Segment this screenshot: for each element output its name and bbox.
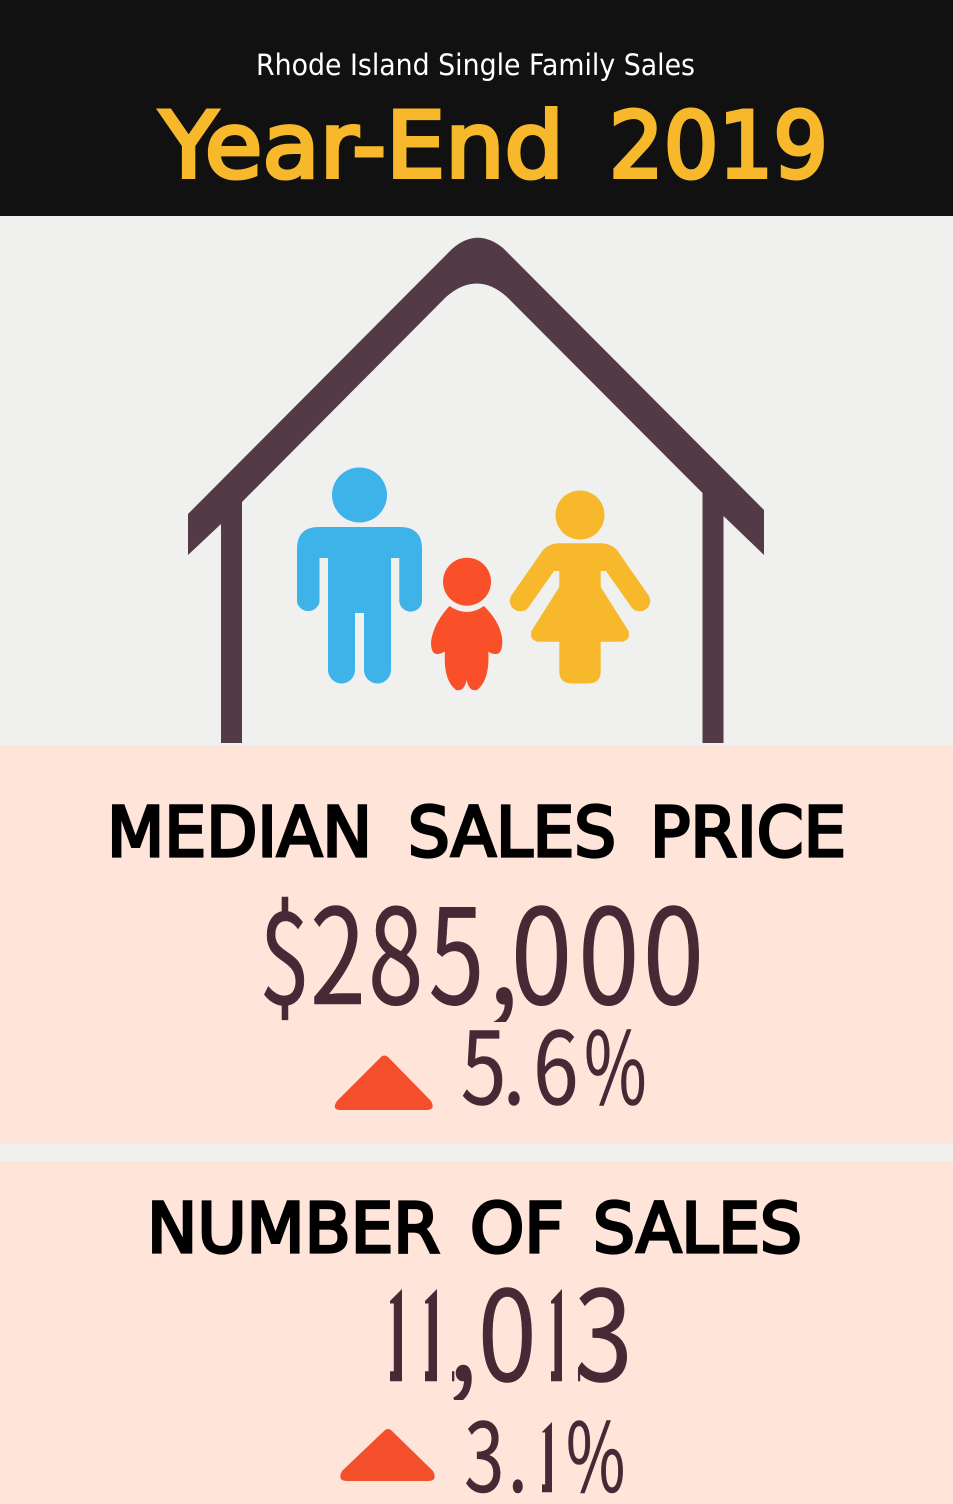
value: ,000 [488, 852, 704, 1043]
change: % [584, 988, 647, 1133]
change [461, 988, 647, 1134]
heading: MEDIAN [107, 793, 372, 873]
subtitle: Rhode Island Single Family Sales [256, 48, 695, 82]
icon: house outline [188, 238, 764, 743]
panel: median sales price [0, 745, 953, 1144]
title [159, 94, 828, 199]
heading: OF [470, 1189, 564, 1269]
icon: father [297, 468, 422, 684]
value: 11,013 [367, 1237, 633, 1418]
value: 285 [310, 851, 484, 1042]
icon: child [431, 558, 502, 690]
icon: up triangle [340, 1429, 435, 1481]
value: $ [259, 857, 310, 1042]
icon: house with family [188, 238, 764, 743]
change [466, 1420, 623, 1494]
heading [107, 793, 846, 873]
title: 2019 [609, 94, 828, 199]
change: 5.6 [461, 989, 579, 1134]
heading [147, 1189, 802, 1269]
heading: SALES [593, 1189, 802, 1269]
heading: PRICE [650, 793, 846, 873]
icon: mother [510, 490, 650, 684]
panel: number of sales [0, 1161, 953, 1504]
title: Year-End [159, 94, 564, 199]
heading: SALES [408, 793, 616, 873]
panel: header [0, 0, 953, 216]
icon: up triangle [335, 1056, 433, 1110]
value [264, 896, 699, 1022]
heading: NUMBER [147, 1189, 440, 1269]
